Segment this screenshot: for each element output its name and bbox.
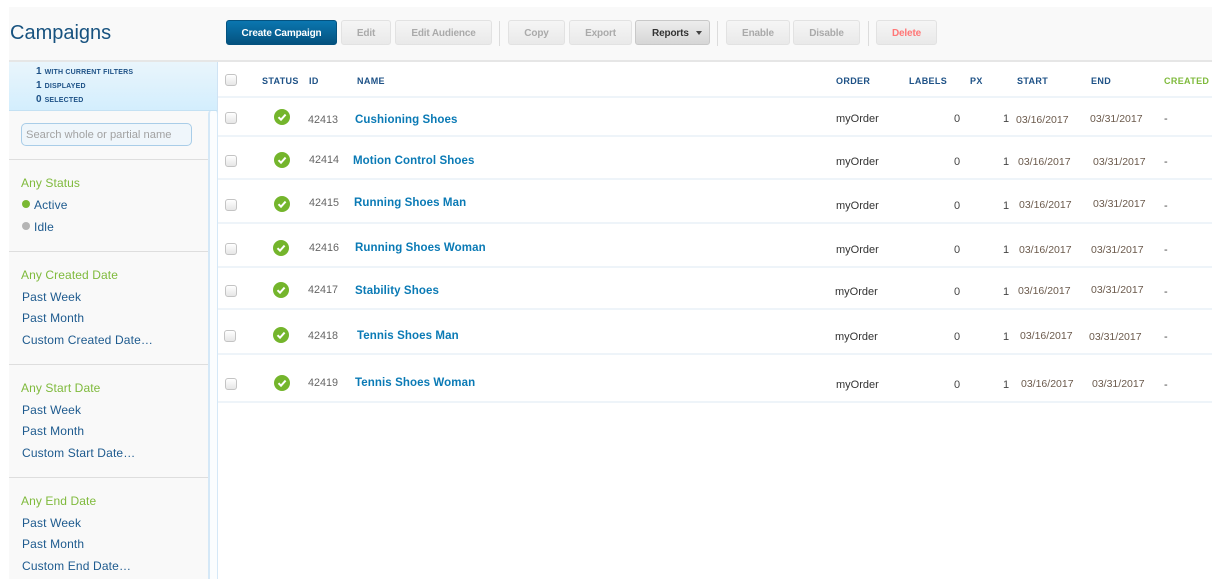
table row: 42417 (225, 282, 1168, 298)
table row: 42416: 42416 (309, 242, 339, 254)
table row: 42414: Motion Control Shoes (353, 155, 474, 167)
table row: 42419: 42419 (308, 377, 338, 389)
button: enable (726, 20, 790, 45)
table row: 42413: 42413 (308, 114, 338, 126)
table row: 42413: Cushioning Shoes (355, 114, 458, 126)
table row: 42415: 1 (1003, 200, 1009, 212)
table row: 42413 (225, 109, 1168, 126)
table row: 42414: 1 (1003, 156, 1009, 168)
option: past month: Past Month (22, 424, 84, 438)
heading: px: PX (970, 76, 983, 86)
table row: 42413: 03/31/2017 (1090, 113, 1143, 125)
table row: 42417: 42417 (308, 284, 338, 296)
table row: 42413: - (1164, 113, 1168, 125)
toolbar buttons (226, 20, 937, 46)
table row: 42418: 42418 (308, 330, 338, 342)
table row: 42417: Stability Shoes (355, 285, 439, 297)
button: copy (508, 20, 565, 45)
table row: 42414: 0 (954, 156, 960, 168)
heading: start: START (1017, 76, 1048, 86)
table row: 42413: 03/16/2017 (1016, 114, 1069, 126)
panel: result counts (9, 62, 217, 111)
option: custom created date: Custom Created Date… (22, 333, 153, 347)
button: create campaign: Create Campaign (242, 28, 322, 39)
table row: 42418: 03/16/2017 (1020, 330, 1073, 342)
icon: active dot (22, 200, 30, 208)
table row: 42419 (225, 375, 1168, 391)
heading: any start date: Any Start Date (21, 381, 100, 395)
table row: 42415 (225, 196, 1168, 212)
filter: created date (21, 268, 153, 347)
button: export (569, 20, 632, 45)
button: edit audience: Edit Audience (411, 28, 476, 39)
option: custom start date: Custom Start Date… (22, 446, 135, 460)
button: reports (635, 20, 710, 45)
heading: created: CREATED (1164, 76, 1209, 86)
option: past week: Past Week (22, 403, 81, 417)
table row: 42418: Tennis Shoes Man (357, 330, 459, 342)
heading: name: NAME (357, 76, 385, 86)
option: past month: Past Month (22, 311, 84, 325)
button: edit: Edit (357, 28, 375, 39)
table row: 42416: 0 (954, 244, 960, 256)
table row: 42414 (225, 152, 1168, 168)
table row: 42416: 1 (1003, 244, 1009, 256)
heading: any created date: Any Created Date (21, 268, 118, 282)
table row: 42414: myOrder (836, 156, 879, 168)
table row: 42415: 03/16/2017 (1019, 199, 1072, 211)
table row: 42416 (225, 240, 1168, 256)
search box (21, 123, 192, 146)
table row: 42419: 03/16/2017 (1021, 378, 1074, 390)
count: with current filters: 1 WITH CURRENT FILTERS (36, 66, 133, 77)
table row: 42415: myOrder (836, 200, 879, 212)
table row: 42418 (224, 327, 1168, 343)
table row: 42418: 1 (1003, 331, 1009, 343)
heading: any status: Any Status (21, 176, 80, 190)
table row: 42414: 03/16/2017 (1018, 156, 1071, 168)
table row: 42416: 03/31/2017 (1091, 244, 1144, 256)
option: active: Active (34, 198, 68, 212)
icon: active status (274, 109, 290, 125)
top toolbar band (9, 7, 1212, 62)
table row: 42417: - (1164, 286, 1168, 298)
table row: 42419: Tennis Shoes Woman (355, 377, 475, 389)
table row: 42418: myOrder (835, 331, 878, 343)
filter: start date (21, 381, 135, 460)
filter: end date (21, 494, 131, 573)
table row: 42416: 03/16/2017 (1019, 244, 1072, 256)
option: past month: Past Month (22, 537, 84, 551)
icon: active status (273, 327, 289, 343)
count: selected: 0 SELECTED (36, 94, 84, 105)
search box: Search whole or partial name (26, 129, 172, 141)
button: create campaign (226, 20, 337, 45)
table row: 42413: 1 (1003, 113, 1009, 125)
table row: 42415: 0 (954, 200, 960, 212)
heading: id: ID (309, 76, 319, 86)
option: custom end date: Custom End Date… (22, 559, 131, 573)
table row: 42419: - (1164, 379, 1168, 391)
button: disable: Disable (809, 28, 844, 39)
button: edit audience (395, 20, 492, 45)
table row: 42417: myOrder (835, 286, 878, 298)
option: idle: Idle (34, 220, 54, 234)
table row: 42415: 42415 (309, 197, 339, 209)
heading: order: ORDER (836, 76, 870, 86)
table row: 42415: Running Shoes Man (354, 197, 466, 209)
table row: 42418: 0 (954, 331, 960, 343)
table row: 42417: 03/16/2017 (1018, 285, 1071, 297)
table row: 42414: 03/31/2017 (1093, 156, 1146, 168)
button: enable: Enable (742, 28, 774, 39)
icon: active status (274, 152, 290, 168)
table row: 42415: - (1164, 200, 1168, 212)
count: displayed: 1 DISPLAYED (36, 80, 86, 91)
table row: 42418: 03/31/2017 (1089, 331, 1142, 343)
button: disable (793, 20, 860, 45)
heading: labels: LABELS (909, 76, 947, 86)
icon: active status (273, 240, 289, 256)
title: Campaigns (10, 22, 111, 44)
table row: 42419: 1 (1003, 379, 1009, 391)
table row: 42415: 03/31/2017 (1093, 198, 1146, 210)
table row: 42413: myOrder (836, 113, 879, 125)
table row: 42419: 03/31/2017 (1092, 378, 1145, 390)
heading: any end date: Any End Date (21, 494, 96, 508)
option: past week: Past Week (22, 516, 81, 530)
table row: 42414: 42414 (309, 154, 339, 166)
table row: 42418: - (1164, 331, 1168, 343)
button: edit (341, 20, 391, 45)
table row: 42417: 1 (1003, 286, 1009, 298)
button: delete: Delete (892, 28, 921, 39)
table row: 42417: 03/31/2017 (1091, 284, 1144, 296)
table row: 42413: 0 (954, 113, 960, 125)
button: reports: Reports (652, 28, 689, 39)
table row: 42416: Running Shoes Woman (355, 242, 486, 254)
column headings (225, 74, 1209, 86)
button: delete (876, 20, 937, 45)
table row: 42414: - (1164, 156, 1168, 168)
table row: 42419: myOrder (836, 379, 879, 391)
icon: active status (274, 375, 290, 391)
heading: status: STATUS (262, 76, 299, 86)
icon: active status (273, 282, 289, 298)
table row: 42417: 0 (954, 286, 960, 298)
table row: 42419: 0 (954, 379, 960, 391)
filter: status (21, 176, 80, 234)
heading: end: END (1091, 76, 1111, 86)
header checkbox (225, 74, 237, 86)
panel: filter sidebar (9, 62, 218, 579)
table row: 42416: - (1164, 244, 1168, 256)
table row: 42416: myOrder (836, 244, 879, 256)
icon: idle dot (22, 222, 30, 230)
option: past week: Past Week (22, 290, 81, 304)
table header (218, 63, 1212, 98)
icon: active status (274, 196, 290, 212)
scroll track (208, 110, 218, 579)
button: copy: Copy (524, 28, 549, 39)
button: export: Export (585, 28, 616, 39)
